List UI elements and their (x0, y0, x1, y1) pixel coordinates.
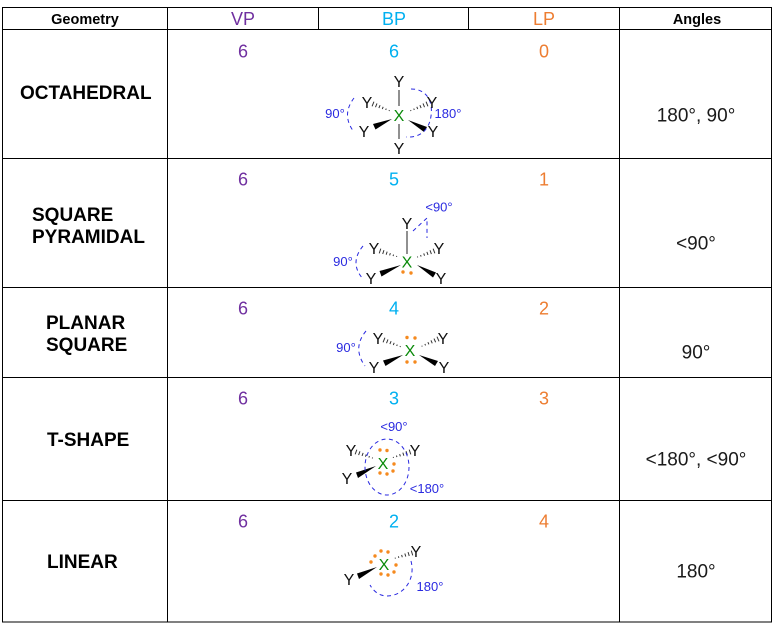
molecule: octahedral: Y (427, 95, 438, 112)
pair counts: square pyramidal (238, 170, 549, 190)
table header: Geometry (51, 12, 119, 28)
molecule: octahedral (325, 74, 461, 158)
row: square pyramidal (32, 170, 716, 288)
angles: planar square: 90° (682, 342, 710, 364)
pair counts: t-shape: 3 (389, 388, 399, 408)
heading: square pyramidal (32, 205, 145, 248)
table header: Angles (673, 12, 721, 28)
row: linear (47, 512, 716, 596)
pair counts: octahedral: 6 (389, 42, 399, 62)
molecule: square pyramidal: X (402, 254, 413, 272)
heading: t-shape: T-SHAPE (47, 430, 129, 451)
molecule: octahedral: Y (394, 141, 405, 158)
molecule: planar square: X (405, 343, 416, 360)
molecule: octahedral: Y (362, 95, 373, 112)
pair counts: planar square: 4 (389, 298, 399, 318)
molecule: planar square: Y (438, 331, 449, 348)
molecule: octahedral: 180° (435, 106, 461, 121)
heading: octahedral: OCTAHEDRAL (20, 83, 152, 104)
table header: VP (231, 9, 255, 29)
molecule: linear: 180° (417, 579, 443, 594)
pair counts: planar square (238, 298, 549, 318)
table header: LP (533, 9, 555, 29)
pair counts: square pyramidal: 1 (539, 170, 549, 190)
molecule: octahedral: Y (359, 124, 370, 141)
row: t-shape (47, 388, 746, 496)
pair counts: octahedral: 0 (539, 42, 549, 62)
table header (51, 9, 721, 29)
molecule: linear: X (379, 557, 390, 574)
molecule: square pyramidal: Y (436, 271, 447, 288)
heading: linear: LINEAR (47, 552, 118, 573)
molecule: octahedral: Y (428, 124, 439, 141)
molecule: square pyramidal: Y (434, 241, 445, 258)
pair counts: t-shape (238, 388, 549, 408)
pair counts: square pyramidal: 6 (238, 170, 248, 190)
angles: linear: 180° (676, 562, 716, 582)
pair counts: linear: 6 (238, 512, 248, 532)
heading: planar square: PLANAR (46, 313, 125, 334)
molecule: square pyramidal: <90° (425, 200, 453, 214)
molecule: planar square: Y (369, 360, 380, 377)
pair counts: planar square: 2 (539, 298, 549, 318)
table header: BP (382, 9, 406, 29)
pair counts: linear: 4 (539, 512, 549, 532)
molecule: t-shape: <90° (380, 419, 408, 434)
molecule: octahedral: Y (394, 74, 405, 91)
molecule: t-shape (342, 419, 444, 496)
molecule: octahedral: 90° (325, 106, 345, 121)
molecule: t-shape: Y (410, 443, 421, 460)
angles: t-shape: <180°, <90° (646, 450, 746, 470)
molecule: square pyramidal: Y (369, 241, 380, 258)
heading: square pyramidal: SQUARE (32, 205, 113, 226)
molecule: t-shape: <180° (410, 481, 444, 496)
pair counts: planar square: 6 (238, 298, 248, 318)
heading: planar square: SQUARE (46, 335, 127, 356)
heading: planar square (46, 313, 127, 356)
pair counts: octahedral (238, 42, 549, 62)
molecule: linear (344, 544, 443, 596)
molecule: planar square: Y (439, 360, 450, 377)
angles: octahedral: 180°, 90° (657, 106, 735, 126)
molecule: t-shape: Y (346, 443, 357, 460)
pair counts: t-shape: 6 (238, 388, 248, 408)
molecule: octahedral: X (394, 108, 405, 125)
molecule: square pyramidal: Y (366, 271, 377, 288)
pair counts: octahedral: 6 (238, 42, 248, 62)
molecule: t-shape: Y (342, 471, 353, 488)
heading: square pyramidal: PYRAMIDAL (32, 227, 145, 248)
molecule: planar square: Y (373, 331, 384, 348)
pair counts: t-shape: 3 (539, 388, 549, 408)
pair counts: square pyramidal: 5 (389, 170, 399, 190)
molecule: square pyramidal (333, 200, 453, 288)
pair counts: linear: 2 (389, 512, 399, 532)
molecule: square pyramidal: 90° (333, 254, 353, 269)
pair counts: linear (238, 512, 549, 532)
angles: square pyramidal: <90° (676, 234, 716, 254)
molecule: planar square (336, 331, 450, 377)
row: octahedral (20, 42, 735, 158)
molecule: square pyramidal: Y (402, 216, 413, 233)
molecule: linear: Y (411, 544, 422, 561)
molecule: t-shape: X (378, 456, 389, 473)
row: planar square (46, 298, 710, 377)
molecule: linear: Y (344, 572, 355, 589)
molecule: planar square: 90° (336, 340, 356, 355)
